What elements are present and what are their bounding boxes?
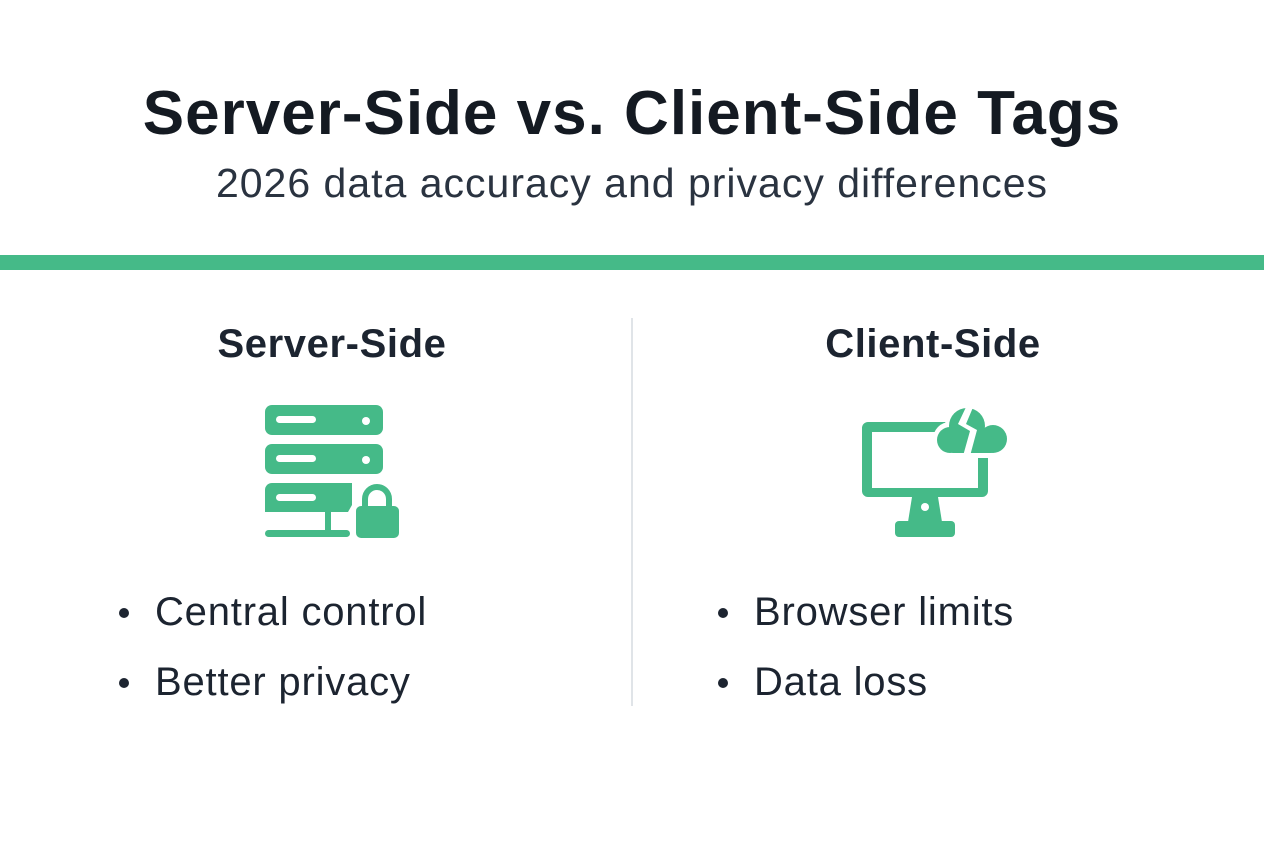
title: Server-Side vs. Client-Side Tags [143, 79, 1121, 148]
panel: server-side [119, 322, 446, 704]
bullet list: client-side: Data loss [754, 660, 928, 704]
icon: server with lock [265, 405, 399, 538]
bullet list: server-side: Better privacy [155, 660, 411, 704]
heading: Client-Side: Client-Side [825, 322, 1041, 366]
bullet list: server-side [119, 590, 427, 704]
white halo around cloud [933, 404, 1011, 458]
bullet list: client-side: Browser limits [754, 590, 1014, 634]
vertical divider [631, 318, 633, 706]
panel: client-side [718, 322, 1041, 704]
icon: monitor with broken cloud [862, 408, 1007, 537]
subtitle: 2026 data accuracy and privacy differences [216, 160, 1048, 206]
green divider bar [0, 255, 1264, 270]
bullet list: client-side [718, 590, 1014, 704]
heading: Server-Side: Server-Side [218, 322, 446, 366]
bullet list: server-side: Central control [155, 590, 427, 634]
